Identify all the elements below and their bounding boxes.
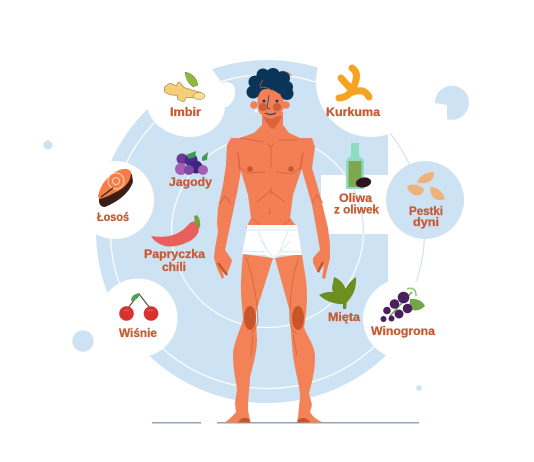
icon: salmon xyxy=(98,169,133,207)
eyes and nose xyxy=(263,100,265,102)
ground lines xyxy=(152,422,419,424)
body lines xyxy=(219,138,323,225)
legs xyxy=(225,254,323,422)
label: Winogrona: Winogrona xyxy=(371,324,435,338)
label: Oliwa z oliwek: Oliwa xyxy=(339,191,372,205)
smile xyxy=(265,113,276,114)
ears xyxy=(250,101,258,109)
feet shade xyxy=(238,418,310,422)
icon: pumpkin seeds xyxy=(407,172,445,200)
background rings on white xyxy=(110,74,424,388)
leg lines xyxy=(246,257,299,355)
label: Papryczka chili: Papryczka xyxy=(144,247,205,261)
neck xyxy=(250,112,292,137)
label: Papryczka chili xyxy=(144,247,205,274)
armpit shade xyxy=(238,153,303,170)
label: Oliwa z oliwek: z oliwek xyxy=(334,202,379,216)
icon: chili xyxy=(151,215,200,247)
decorative dots xyxy=(44,56,422,391)
label: Jagody: Jagody xyxy=(169,175,212,189)
cheeks xyxy=(259,103,267,111)
right arm xyxy=(296,138,330,279)
icon: mint xyxy=(319,277,356,309)
underwear xyxy=(242,225,302,258)
icon: turmeric xyxy=(339,68,369,98)
torso xyxy=(236,125,306,228)
label: Pestki dyni: Pestki xyxy=(409,204,443,218)
label: Oliwa z oliwek xyxy=(334,191,379,216)
icon: ginger xyxy=(166,72,205,100)
background blue disc xyxy=(96,60,388,403)
knees xyxy=(244,306,256,330)
panel: white bubbles xyxy=(76,27,443,359)
panel: pestki bubble xyxy=(386,161,464,239)
decorative pie circle xyxy=(435,86,469,120)
icon: berries xyxy=(175,151,208,175)
label: Imbir: Imbir xyxy=(170,105,201,119)
icon: olive oil bottle xyxy=(346,143,372,189)
label: Kurkuma: Kurkuma xyxy=(326,105,380,119)
left arm xyxy=(214,138,245,279)
label: Mięta: Mięta xyxy=(328,310,360,324)
nipples xyxy=(247,166,253,172)
icon: grapes xyxy=(380,288,425,322)
label: Pestki dyni: dyni xyxy=(413,215,439,229)
figure: man in underwear xyxy=(214,68,330,422)
hair strands xyxy=(260,71,292,92)
hair xyxy=(246,68,294,100)
label: Papryczka chili: chili xyxy=(162,260,186,274)
face xyxy=(257,85,284,119)
label: Wiśnie: Wiśnie xyxy=(119,326,157,340)
hand shade xyxy=(218,262,323,275)
label: Pestki dyni xyxy=(409,204,443,229)
icon: cherries xyxy=(119,293,158,321)
label: Łosoś: Łosoś xyxy=(97,210,129,224)
